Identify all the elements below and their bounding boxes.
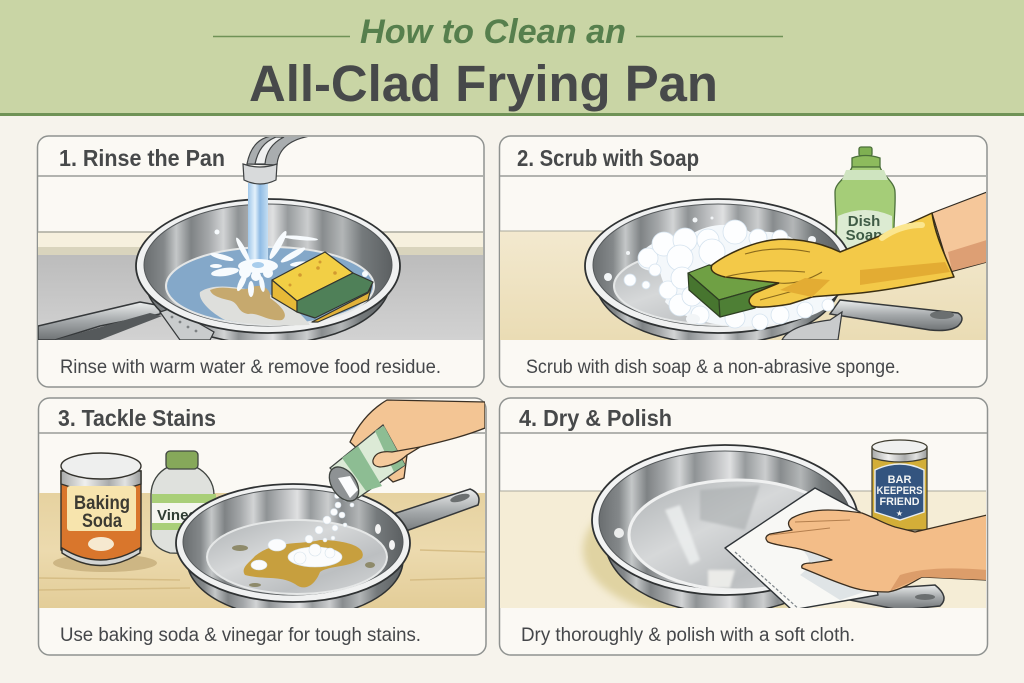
title: main line: All-Clad Frying Pan [249, 55, 718, 112]
green shaker [323, 425, 405, 506]
panel 2: scrub with soap [500, 136, 987, 387]
food residue [210, 286, 285, 320]
dish soap bottle: Dish [848, 213, 880, 230]
panel 3: tackle stains [38, 398, 486, 655]
skin arm [932, 192, 987, 272]
thumb [373, 447, 420, 467]
baking soda can: Soda [82, 511, 122, 532]
water splash [210, 229, 368, 297]
dish soap bottle [834, 147, 895, 255]
baking soda can [61, 453, 141, 566]
polishing cloth [725, 488, 878, 610]
panel 1: rinse the pan [38, 136, 484, 387]
water in pan [166, 247, 374, 325]
caption: Dry thoroughly & polish with a soft cloth. [521, 625, 855, 646]
heading: 1. Rinse the Pan [59, 145, 225, 171]
Bar Keepers Friend can: BAR [888, 474, 911, 486]
hand palm [350, 400, 485, 482]
baking soda can: Baking [74, 493, 130, 514]
hand [766, 510, 987, 592]
illustration: rinsing pan under faucet [38, 136, 484, 344]
heading: 2. Scrub with Soap [517, 145, 699, 171]
yellow glove [711, 213, 954, 307]
caption: Use baking soda & vinegar for tough stains. [60, 625, 421, 646]
Bar Keepers Friend can: ★ [896, 509, 903, 518]
caption: Rinse with warm water & remove food residue. [60, 357, 441, 378]
heading: 3. Tackle Stains [58, 405, 216, 431]
vinegar jar [151, 451, 216, 553]
vinegar jar: Vinegar [157, 507, 212, 524]
illustration: polishing pan with cloth [500, 440, 987, 620]
caption: Scrub with dish soap & a non-abrasive sponge. [526, 357, 900, 378]
soap foam [624, 220, 834, 330]
illustration: scrubbing with glove and sponge [500, 147, 987, 344]
title: small line: How to Clean an [360, 13, 626, 51]
illustration: baking soda and vinegar on pan [39, 400, 486, 618]
sponge [272, 252, 373, 322]
faucet [243, 136, 310, 184]
title banner [0, 0, 1024, 116]
dish soap bottle: Soap [846, 227, 882, 244]
green sponge [688, 265, 779, 317]
Bar Keepers Friend can: KEEPERS [876, 485, 922, 497]
baking soda pile [250, 494, 354, 570]
panel 4: dry and polish [500, 398, 988, 655]
heading: 4. Dry & Polish [519, 405, 672, 431]
Bar Keepers Friend can [872, 440, 927, 530]
Bar Keepers Friend can: FRIEND [880, 496, 920, 508]
stain [232, 540, 375, 587]
